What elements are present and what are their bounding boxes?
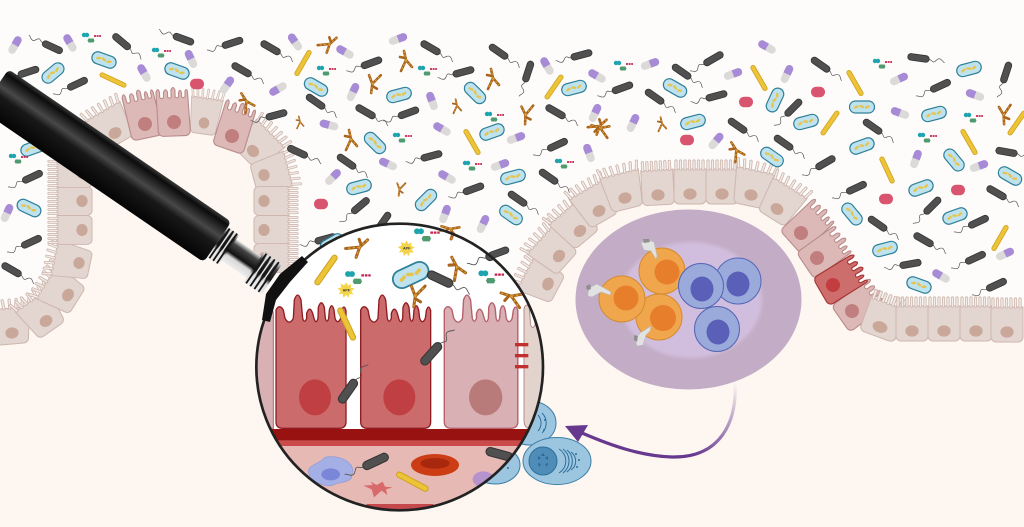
metal neck	[207, 227, 282, 294]
epithelium: left arch	[0, 87, 301, 346]
plasma cell right	[523, 438, 591, 484]
invading bacteria	[318, 247, 509, 400]
dendritic cell	[363, 482, 393, 497]
blue lymphocytes	[678, 258, 761, 352]
capsule bacteria	[15, 50, 1024, 295]
toxins in lens	[345, 228, 504, 284]
APF star 1	[337, 282, 355, 298]
rod bacteria	[3, 28, 1024, 298]
tight junction bars	[515, 343, 528, 368]
yellow rod bacteria	[102, 53, 1024, 248]
orange immune cells	[599, 248, 685, 340]
macrophage	[308, 457, 353, 486]
damaged enterocyte 3	[444, 295, 518, 428]
purple cell fragment	[472, 471, 492, 486]
epithelium: right mound	[509, 159, 1023, 343]
follicle inner zone	[620, 242, 762, 358]
partial beige cell right	[524, 304, 542, 428]
gut lumen	[0, 0, 1024, 325]
arrow: follicle to plasma cells	[565, 383, 735, 457]
antibodies	[238, 34, 1011, 240]
pill bacteria	[0, 32, 1015, 284]
red enterocyte 1	[276, 295, 346, 428]
pink microbes	[190, 79, 965, 209]
red enterocyte 2	[361, 295, 431, 428]
basement membrane	[272, 429, 528, 446]
lens contents	[258, 226, 542, 509]
lower red strip	[366, 504, 434, 509]
follicle outer zone	[576, 210, 802, 390]
plasma cell upper	[504, 401, 556, 445]
immune follicle	[576, 210, 802, 390]
plasma cell lower	[470, 446, 520, 484]
bacteria in lamina	[344, 449, 533, 489]
magnifying glass handle	[0, 69, 308, 322]
lens rim	[256, 224, 543, 510]
antibodies in lens	[345, 218, 526, 309]
rim joint	[262, 256, 308, 322]
black grip	[0, 69, 231, 262]
toxin molecules	[9, 33, 983, 170]
lamina propria	[282, 446, 518, 505]
APF star 2	[398, 241, 415, 256]
receptor molecules	[586, 239, 657, 346]
plasma cells	[470, 401, 591, 484]
APF star 2: APF	[403, 247, 411, 251]
red blood cell	[411, 454, 459, 476]
magnifying lens	[250, 218, 550, 520]
APF star 1: APF	[343, 288, 351, 292]
nuclei	[299, 379, 502, 415]
partial cell left	[258, 310, 274, 429]
